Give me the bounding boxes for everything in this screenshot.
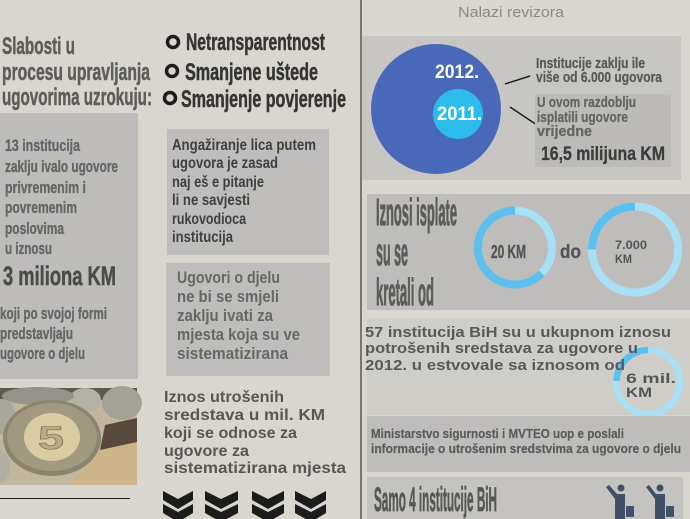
list: consequences bbox=[164, 29, 346, 113]
text: rule note: mjesta koja su ve bbox=[177, 325, 300, 344]
text: work contracts bbox=[0, 304, 107, 363]
callout: amount paid: 16,5 milijuna KM bbox=[541, 144, 665, 165]
text: 13 institutions: povremenim bbox=[5, 198, 77, 217]
text: consequence items: Netransparentnost bbox=[186, 29, 325, 56]
callout: amount paid: vrijedne bbox=[537, 124, 592, 140]
text: work contracts: predstavljaju bbox=[0, 324, 73, 343]
panel: payment range bbox=[367, 192, 690, 314]
text: 3 million KM: 3 miliona KM bbox=[3, 261, 116, 291]
text: consequence items: Smanjene uštede bbox=[185, 59, 318, 86]
chart: ring 6 mil KM: KM bbox=[626, 384, 652, 400]
text: more than 6000 contracts bbox=[536, 56, 663, 86]
text: 13 institutions: poslovima bbox=[5, 219, 64, 238]
connector lines bbox=[505, 76, 537, 125]
callout: amount paid bbox=[535, 94, 671, 167]
chart: ring 20 KM: 20 KM bbox=[491, 242, 526, 262]
panel: temporary contracts bbox=[0, 113, 138, 379]
text: consequence items bbox=[181, 29, 346, 113]
panel: ministries note bbox=[367, 416, 690, 472]
text: rule note: sistematizirana bbox=[177, 344, 288, 363]
text: hiring note: li ne savjesti bbox=[172, 192, 250, 209]
chart: nested circles bbox=[371, 44, 501, 174]
text: rule note bbox=[177, 268, 300, 363]
icon: person with briefcase 1 bbox=[606, 484, 634, 519]
title: auditors' findings: Nalazi revizora bbox=[458, 4, 565, 21]
text: 13 institutions bbox=[5, 136, 118, 258]
text: hiring note: naj eš e pitanje bbox=[172, 174, 264, 191]
text: amount spent: sistematizirana mjesta bbox=[164, 460, 346, 477]
panel: payment range: kretali od bbox=[376, 272, 434, 314]
text: 13 institutions: zaklju ivalo ugovore bbox=[5, 157, 118, 176]
text: hiring note: institucija bbox=[172, 229, 233, 246]
text: to: do bbox=[560, 242, 581, 263]
callout: amount paid: isplatili ugovore bbox=[537, 110, 628, 126]
text: hiring note: rukovodioca bbox=[172, 211, 246, 228]
panel: ministries note: Ministarstvo sigurnosti i MVTEO uop e poslali bbox=[371, 427, 624, 441]
text: amount spent: sredstava u mil. KM bbox=[164, 407, 325, 424]
panel: 57 institutions bbox=[365, 318, 690, 415]
chart: ring 6 mil KM bbox=[616, 350, 680, 414]
chart: ring 7000 KM: KM bbox=[615, 252, 632, 266]
text: amount spent: Iznos utrošenih bbox=[164, 389, 284, 406]
text: institutions summary: 2012. u estvovale sa iznosom od bbox=[365, 358, 625, 374]
text: institutions summary: 57 institucija BiH su u ukupnom iznosu bbox=[365, 325, 671, 341]
text: work contracts: ugovore o djelu bbox=[0, 344, 85, 363]
text: 13 institutions: 13 institucija bbox=[5, 136, 80, 155]
panel: hiring through contracts bbox=[167, 129, 329, 255]
text: payment range label: su se bbox=[376, 232, 408, 274]
panel: payment range: Iznosi isplate bbox=[376, 192, 457, 234]
image: coins: 5 bbox=[38, 420, 64, 456]
icon: bullet ring 2 bbox=[166, 66, 178, 76]
callout: amount paid: U ovom razdoblju bbox=[537, 95, 636, 111]
text: hiring note: Angažiranje lica putem bbox=[172, 137, 316, 154]
text: 13 institutions: privremenim i bbox=[5, 178, 86, 197]
text: more than 6000 contracts: više od 6.000 ugovora bbox=[536, 70, 663, 86]
chart: ring 20 KM bbox=[478, 210, 552, 284]
text: institutions summary bbox=[365, 325, 671, 374]
text: amount spent: koji se odnose za bbox=[164, 425, 297, 442]
text: 13 institutions: u iznosu bbox=[5, 239, 52, 258]
heading: weaknesses: procesu upravljanja bbox=[2, 59, 150, 86]
panel: ministries note: informacije o utrošenim sredstvima za ugovore o djelu bbox=[371, 442, 681, 456]
text: rule note: Ugovori o djelu bbox=[177, 268, 280, 287]
chart: nested circles: 2012. bbox=[435, 62, 479, 83]
text: hiring note: ugovora je zasad bbox=[172, 155, 278, 172]
icon: bullet ring 1 bbox=[168, 36, 178, 48]
chart: ring 6 mil KM: 6 mil. bbox=[626, 370, 676, 386]
text: amount spent: ugovore za bbox=[164, 443, 249, 460]
panel: work contracts rule bbox=[166, 263, 330, 376]
text: rule note: zaklju ivati za bbox=[177, 306, 273, 325]
image: coins bbox=[0, 386, 142, 485]
text: consequence items: Smanjenje povjerenje bbox=[181, 86, 346, 113]
chart: nested circles: 2011. bbox=[437, 104, 482, 125]
icon: person with briefcase 2 bbox=[646, 484, 674, 519]
text: payment range label bbox=[376, 192, 457, 314]
text: rule note: ne bi se smjeli bbox=[177, 287, 279, 306]
text: amount spent bbox=[164, 389, 346, 477]
heading: weaknesses: Slabosti u bbox=[2, 33, 75, 60]
text: hiring note bbox=[172, 137, 316, 246]
text: more than 6000 contracts: Institucije zaklju ile bbox=[536, 56, 645, 72]
chart: ring 7000 KM bbox=[592, 206, 678, 292]
panel: contracts by year bbox=[362, 36, 681, 180]
text: institutions summary: potrošenih sredstava za ugovore u bbox=[365, 341, 638, 357]
chart: ring 7000 KM: 7.000 bbox=[615, 238, 647, 252]
text: work contracts: koji po svojoj formi bbox=[0, 304, 107, 323]
icon: chevrons bbox=[163, 491, 326, 519]
icon: bullet ring 3 bbox=[164, 92, 176, 104]
heading: weaknesses bbox=[2, 33, 152, 111]
heading: weaknesses: ugovorima uzrokuju: bbox=[2, 84, 152, 111]
